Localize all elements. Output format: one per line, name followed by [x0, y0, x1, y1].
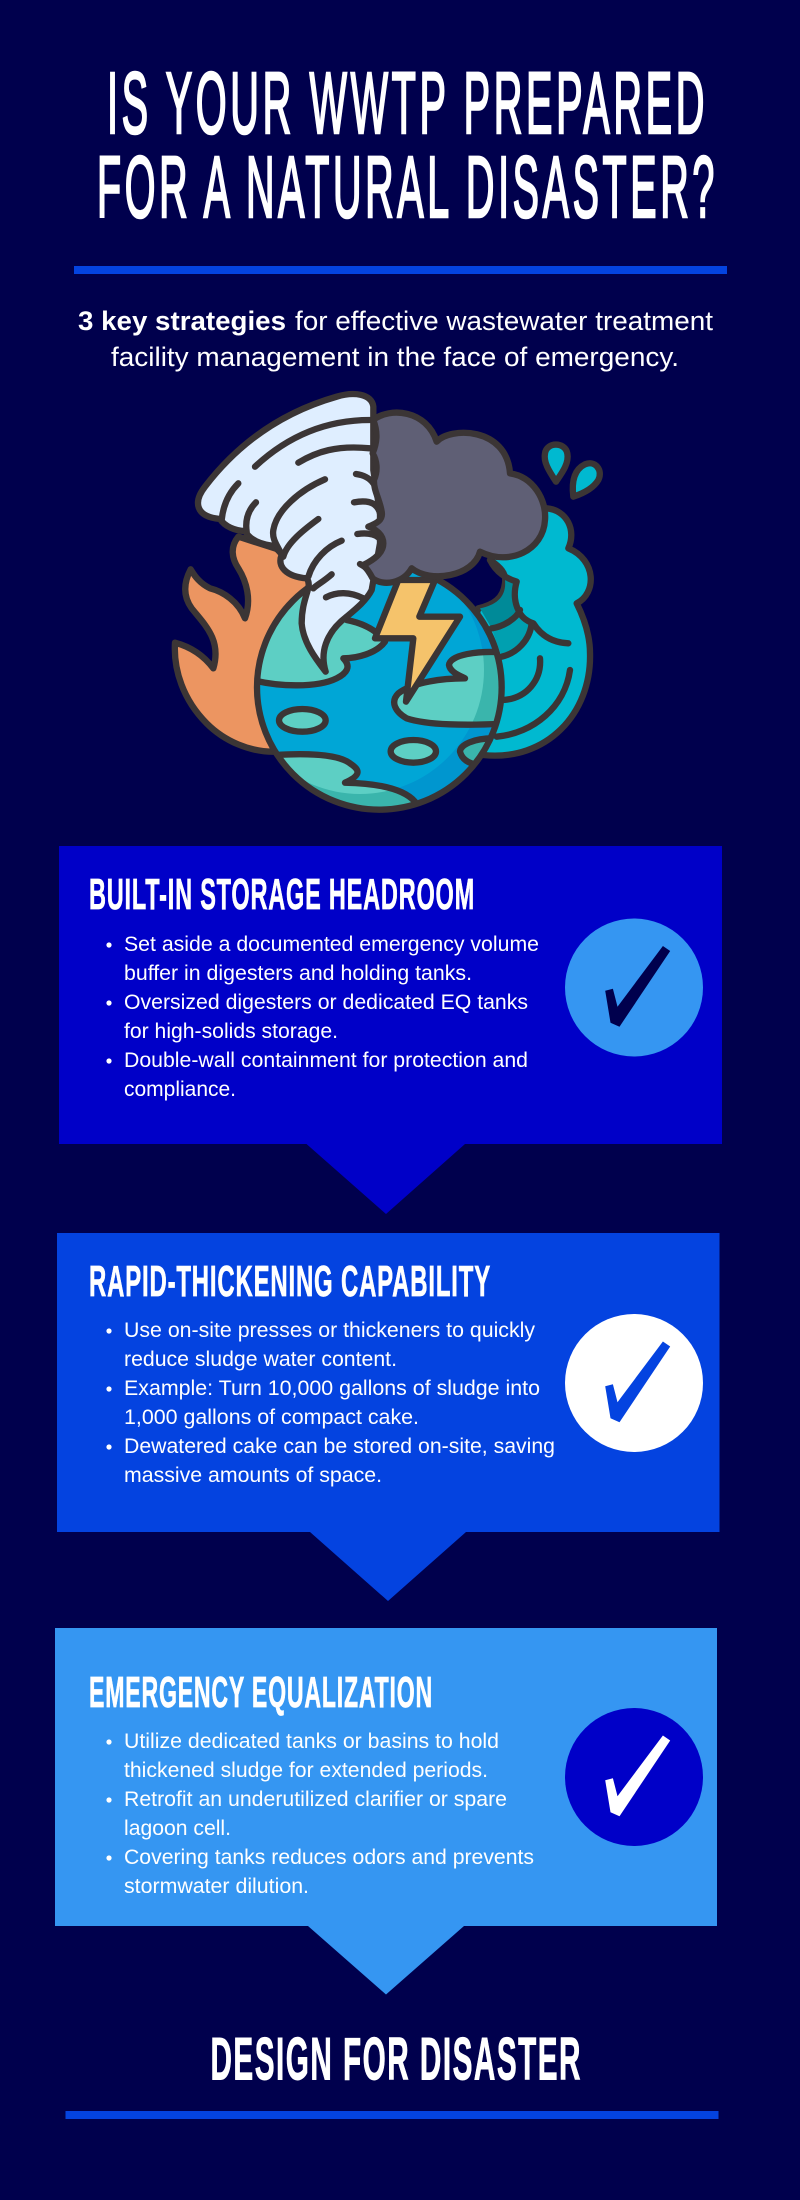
- panel 3 bullet list: [106, 1730, 534, 1898]
- icon: check mark in light blue circle: [565, 918, 703, 1056]
- panel 3 background with pointer: [55, 1628, 717, 1994]
- icon: land outlines: [250, 620, 508, 802]
- footer divider bar: [66, 2111, 718, 2119]
- title: [97, 55, 718, 236]
- panel: rapid-thickening capability: [57, 1233, 720, 1601]
- icon: land masses, lit: [260, 596, 484, 794]
- icon: earth: [254, 572, 505, 813]
- icon: tornado: [198, 394, 382, 672]
- panel 1 bullet list: Oversized digesters or dedicated EQ tanks: [124, 991, 528, 1014]
- panel 3 bullet list: stormwater dilution.: [124, 1875, 309, 1898]
- panel 1 bullet list: compliance.: [124, 1078, 236, 1101]
- panel 1 bullet list: Set aside a documented emergency volume: [124, 933, 539, 956]
- panel 3 bullet list: lagoon cell.: [124, 1817, 231, 1840]
- subtitle: facility management in the face of emergency.: [111, 342, 679, 372]
- icon: lightning bolt: [375, 580, 460, 702]
- panel 3 heading: EMERGENCY EQUALIZATION: [89, 1668, 433, 1717]
- subtitle: 3 key strategies: [78, 306, 286, 336]
- panel 2 bullet list: [106, 1319, 555, 1487]
- subtitle: [78, 306, 714, 372]
- panel 3 bullet list: Utilize dedicated tanks or basins to hold: [124, 1730, 499, 1753]
- title divider bar: [74, 266, 727, 274]
- panel 1 bullet list: [106, 933, 539, 1101]
- panel: emergency equalization: [55, 1628, 717, 1994]
- icon: flame: [175, 537, 317, 752]
- icon: check mark in dark blue circle: [565, 1708, 703, 1846]
- icon: check mark in white circle: [565, 1314, 703, 1452]
- icon: water drops: [545, 445, 600, 497]
- panel 1 bullet list: Double-wall containment for protection and: [124, 1049, 528, 1072]
- panel 2 bullet list: Use on-site presses or thickeners to quickly: [124, 1319, 536, 1342]
- panel 1 bullet list: for high-solids storage.: [124, 1020, 338, 1043]
- subtitle: for effective wastewater treatment: [295, 306, 714, 336]
- panel 3 bullet list: thickened sludge for extended periods.: [124, 1759, 488, 1782]
- panel: built-in storage headroom: [59, 846, 722, 1214]
- panel 2 bullet list: reduce sludge water content.: [124, 1348, 397, 1371]
- infographic page: [55, 70, 727, 2119]
- panel 2 background with pointer: [57, 1233, 720, 1601]
- icon: storm cloud: [363, 413, 545, 583]
- panel 1 bullet list: buffer in digesters and holding tanks.: [124, 962, 472, 985]
- panel 2 bullet list: 1,000 gallons of compact cake.: [124, 1406, 419, 1429]
- icon: wave: [450, 508, 591, 756]
- panel 1 heading: BUILT-IN STORAGE HEADROOM: [89, 870, 475, 919]
- panel 3 bullet list: Retrofit an underutilized clarifier or spare: [124, 1788, 507, 1811]
- icon: natural disasters around the earth: [175, 394, 600, 817]
- panel 2 bullet list: Example: Turn 10,000 gallons of sludge into: [124, 1377, 540, 1400]
- panel 3 bullet list: Covering tanks reduces odors and prevents: [124, 1846, 534, 1869]
- panel 1 background with pointer: [59, 846, 722, 1214]
- panel 2 bullet list: Dewatered cake can be stored on-site, saving: [124, 1435, 555, 1458]
- icon: land masses, shaded edge: [307, 655, 498, 806]
- panel 2 bullet list: massive amounts of space.: [124, 1464, 382, 1487]
